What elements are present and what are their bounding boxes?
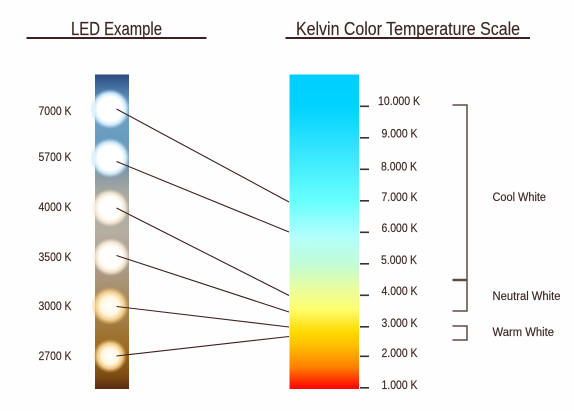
LED temperature labels: 4000 K [38,202,72,214]
heading: LED Example: LED Example [71,19,162,39]
scale labels: 1.000 K [382,380,418,392]
scale labels: 9.000 K [382,128,418,140]
LED temperature labels: 5700 K [38,152,72,164]
scale labels [378,96,420,392]
LED temperature labels: 3500 K [38,252,72,264]
scale labels: 4.000 K [382,286,418,298]
scale labels: 6.000 K [382,223,418,235]
label: Neutral White: Neutral White [492,291,560,303]
bracket: cool white [452,105,467,280]
scale labels: 10.000 K [378,96,420,108]
heading: Kelvin Color Temperature Scale: Kelvin Color Temperature Scale [296,19,520,39]
LED strip photo [90,74,130,389]
connector lines from LEDs to scale [116,109,289,356]
scale labels: 3.000 K [382,318,418,330]
LED temperature labels: 3000 K [38,301,72,313]
scale labels: 2.000 K [382,348,418,360]
color temperature gradient bar [290,74,359,389]
label: Cool White: Cool White [492,192,546,204]
LED temperature labels [38,106,72,363]
bracket: warm white [452,326,467,340]
scale tick marks [360,106,369,389]
scale labels: 5.000 K [381,255,417,267]
label: Warm White: Warm White [492,327,554,339]
scale labels: 7.000 K [382,192,418,204]
LED temperature labels: 2700 K [38,351,72,363]
LED temperature labels: 7000 K [38,106,72,118]
scale labels: 8.000 K [381,162,417,174]
bracket: neutral white [452,280,467,311]
